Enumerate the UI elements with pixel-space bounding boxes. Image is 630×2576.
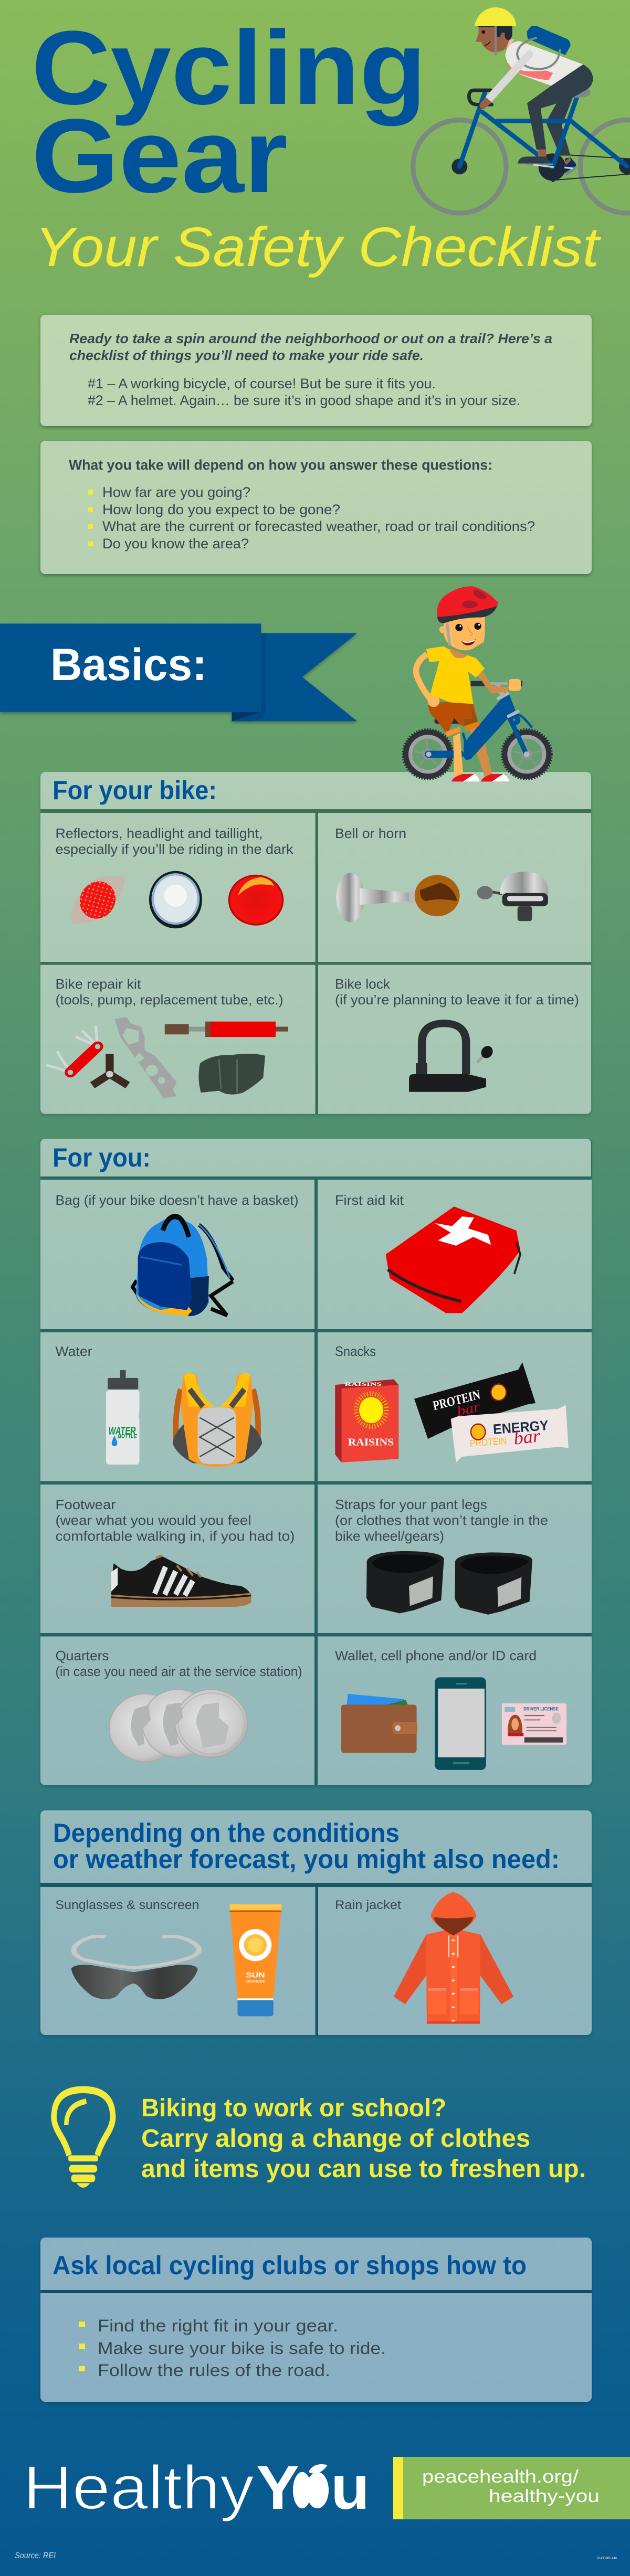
intro text: Ready to take a spin around the neighborhood or out on a trail? Here’s a (69, 331, 552, 346)
illustration: child with balance bike (403, 586, 552, 781)
source note: Source: REI (15, 2551, 56, 2560)
icon: u-lock (409, 1023, 495, 1092)
callout: website: peacehealth.org/ (422, 2467, 579, 2487)
icon: quarters coins (109, 1690, 247, 1762)
callout: website: healthy-you (489, 2486, 600, 2506)
icon: energy bar: bar (513, 1426, 542, 1449)
ribbon label: Basics: (50, 640, 207, 690)
intro text: #1 – A working bicycle, of course! But be sure it fits you. (88, 376, 436, 391)
logo: healthy you: u (331, 2453, 370, 2522)
question list (88, 484, 535, 552)
cell: quarters (40, 1636, 314, 1785)
cell: bike repair kit: Bike repair kit (56, 976, 141, 992)
subtitle: Your Safety Checklist (35, 216, 602, 278)
icon: water bottle: WATER (109, 1426, 136, 1437)
panel: for your bike (40, 772, 591, 1114)
title: Cycling (32, 9, 426, 126)
cell: water: Water (56, 1343, 92, 1359)
cell: straps: Straps for your pant legs (335, 1497, 487, 1512)
icon: water bottle (106, 1370, 140, 1465)
cell: sunglasses and sunscreen: Sunglasses & sunscreen (56, 1898, 200, 1912)
questions heading: What you take will depend on how you answer these questions: (69, 457, 492, 473)
cell: wallet, phone, id (318, 1636, 592, 1785)
cell: snacks (318, 1332, 592, 1481)
cell: water (40, 1332, 314, 1481)
list: ask about (40, 2293, 592, 2402)
cell: bike lock: Bike lock (335, 976, 391, 992)
cell: reflectors and lights (40, 813, 315, 962)
callout: biking to work: Carry along a change of clothes (141, 2125, 530, 2153)
icon: sunscreen tube (230, 1904, 281, 2016)
icons: multi-tool, wrench, pump, tube (46, 1017, 288, 1098)
illustration: cyclist (413, 7, 630, 213)
cell: rain jacket (318, 1887, 592, 2035)
cell: bell or horn: Bell or horn (335, 825, 406, 841)
icon: sunscreen tube: SUN (246, 1971, 265, 1979)
panel: for you (40, 1139, 592, 1785)
logo: healthy you: Healthy (23, 2453, 254, 2522)
cell: straps (318, 1485, 592, 1633)
icon: energy bar (451, 1405, 569, 1462)
panel: conditions (40, 1810, 592, 2035)
cell: quarters: Quarters (56, 1648, 109, 1663)
cell: first aid kit (318, 1180, 592, 1329)
header: for your bike (40, 772, 591, 809)
logo: healthy you (23, 2453, 370, 2522)
panel: intro (40, 315, 592, 426)
cell: footwear: Footwear (56, 1497, 116, 1512)
icon: raisins box: RAISINS (348, 1437, 394, 1448)
cell: snacks: Snacks (335, 1343, 376, 1359)
header: conditions: or weather forecast, you might also need: (53, 1844, 560, 1874)
cell: footwear (40, 1485, 314, 1633)
cell: reflectors and lights: especially if you’ll be riding in the dark (56, 841, 294, 857)
question list: How long do you expect to be gone? (102, 502, 340, 517)
cell: bike lock: (if you’re planning to leave it for a time) (335, 992, 579, 1008)
icon: sneaker (111, 1555, 251, 1607)
callout: website (393, 2457, 630, 2519)
callout: biking to work: Biking to work or school? (141, 2094, 446, 2122)
icon: energy bar: ENERGY (492, 1418, 549, 1437)
list: ask about: Find the right fit in your gear. (98, 2316, 338, 2335)
job code: 18-COMR-140 (596, 2557, 617, 2560)
panel: questions (40, 441, 592, 574)
icon: raisins box: RAISINS (345, 1382, 382, 1387)
header: for you (40, 1139, 591, 1176)
cell: straps: (or clothes that won’t tangle in the (335, 1512, 548, 1528)
icon: reflective leg straps (366, 1551, 532, 1615)
icon: light bulb (54, 2090, 113, 2188)
icon: protein bar: PROTEIN (432, 1388, 481, 1413)
intro text: #2 – A helmet. Again… be sure it’s in good shape and it’s in your size. (88, 393, 520, 408)
callout: biking to work: and items you can use to freshen up. (141, 2155, 586, 2183)
icon: backpack (133, 1216, 233, 1316)
header: ask local clubs: Ask local cycling clubs or shops how to (52, 2251, 527, 2280)
header: for your bike: For your bike: (52, 776, 217, 805)
cell: quarters: (in case you need air at the service station) (56, 1663, 302, 1679)
icon: wallet (341, 1694, 417, 1753)
list: ask about: Follow the rules of the road. (98, 2361, 330, 2380)
icon: water bottle: BOTTLE (118, 1434, 138, 1439)
icon: raisins box (335, 1379, 398, 1462)
icon: sunglasses (71, 1936, 199, 1999)
cell: sunglasses and sunscreen (40, 1887, 315, 2035)
cell: bag (40, 1180, 314, 1329)
cell: bike repair kit: (tools, pump, replacement tube, etc.) (56, 992, 284, 1008)
cell: footwear: (wear what you would you feel (56, 1512, 251, 1528)
header: for you: For you: (52, 1143, 151, 1172)
cell: rain jacket: Rain jacket (335, 1898, 401, 1912)
header: conditions (40, 1810, 592, 1883)
question list: Do you know the area? (102, 536, 249, 552)
question list: What are the current or forecasted weather, road or trail conditions? (102, 518, 535, 534)
icon: apple (293, 2464, 329, 2508)
icons: reflector, headlight, taillight (70, 871, 284, 928)
icon: first aid kit (386, 1206, 520, 1313)
intro text (69, 331, 552, 408)
cell: bell or horn (318, 813, 591, 962)
icon: rain jacket (394, 1892, 513, 2024)
title: Gear (32, 98, 288, 215)
icon: sunscreen tube: SCREEN (246, 1979, 265, 1984)
cell: bag: Bag (if your bike doesn’t have a basket) (56, 1192, 298, 1208)
ribbon: basics (0, 623, 357, 721)
icon: hydration pack (173, 1373, 262, 1467)
header: conditions: Depending on the conditions (53, 1818, 400, 1848)
callout: biking to work (141, 2094, 586, 2183)
cell: straps: bike wheel/gears) (335, 1528, 444, 1544)
icon: protein bar: bar (455, 1398, 481, 1419)
intro text: checklist of things you’ll need to make your ride safe. (69, 347, 424, 363)
icon: id card: DRIVER LICENSE (523, 1706, 559, 1711)
header: ask local clubs (40, 2238, 592, 2290)
question list: How far are you going? (102, 484, 250, 500)
icons: horn and bell (337, 872, 549, 922)
icon: energy bar: PROTEIN (469, 1435, 507, 1449)
cell: wallet, phone, id: Wallet, cell phone and/or ID card (335, 1648, 537, 1663)
icon: phone (435, 1677, 486, 1770)
panel: ask local clubs (40, 2238, 592, 2402)
cell: bike repair kit (40, 965, 315, 1114)
logo: healthy you: Y (256, 2453, 299, 2522)
icon: id card (502, 1703, 566, 1745)
cell: reflectors and lights: Reflectors, headlight and taillight, (56, 825, 263, 841)
cell: footwear: comfortable walking in, if you had to) (56, 1528, 295, 1544)
cell: bike lock (318, 965, 591, 1114)
title (32, 9, 426, 215)
cell: first aid kit: First aid kit (335, 1192, 404, 1208)
list: ask about: Make sure your bike is safe to ride. (98, 2339, 386, 2358)
icon: protein bar (414, 1362, 536, 1439)
